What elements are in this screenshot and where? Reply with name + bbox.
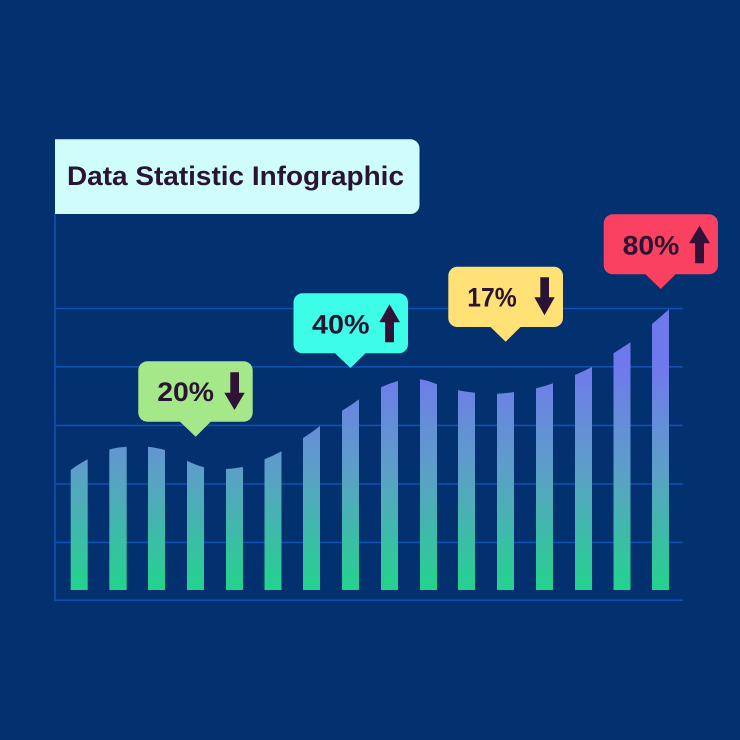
- bar 2: [109, 447, 127, 590]
- title background: [55, 139, 420, 214]
- title text: Data Statistic Infographic: [67, 161, 404, 191]
- bar 12: [497, 392, 514, 590]
- callout bubble: [448, 267, 563, 342]
- callout: 80% up: [604, 214, 718, 289]
- bar 5: [226, 467, 243, 590]
- bar 4: [187, 461, 204, 590]
- bar 1: [71, 459, 88, 590]
- callout bubble: [138, 361, 253, 437]
- bar 8: [342, 399, 359, 590]
- value: 40%: [312, 309, 370, 339]
- bar 16: [652, 309, 669, 590]
- icon: up arrow: [689, 226, 710, 263]
- callout bubble: [294, 293, 408, 368]
- bar 3: [148, 447, 165, 590]
- icon: up arrow: [379, 304, 400, 342]
- value: 17%: [467, 282, 517, 312]
- bar 15: [614, 342, 630, 590]
- bar 11: [458, 390, 475, 590]
- bar 14: [575, 367, 592, 590]
- bar 13: [536, 383, 553, 590]
- bar 9: [381, 381, 398, 590]
- callout: 40% up: [294, 293, 408, 368]
- icon: down arrow: [224, 372, 245, 410]
- bar 10: [420, 379, 437, 590]
- callout: 17% down: [448, 267, 563, 342]
- bar 6: [264, 451, 282, 590]
- bar 7: [303, 426, 320, 590]
- title panel: [55, 139, 420, 214]
- icon: down arrow: [534, 277, 555, 315]
- chart axes and grid: [55, 214, 683, 600]
- bar chart: [71, 309, 669, 590]
- value: 80%: [623, 230, 679, 260]
- callout bubble: [604, 214, 718, 289]
- value: 20%: [157, 377, 214, 407]
- callout: 20% down: [138, 361, 253, 437]
